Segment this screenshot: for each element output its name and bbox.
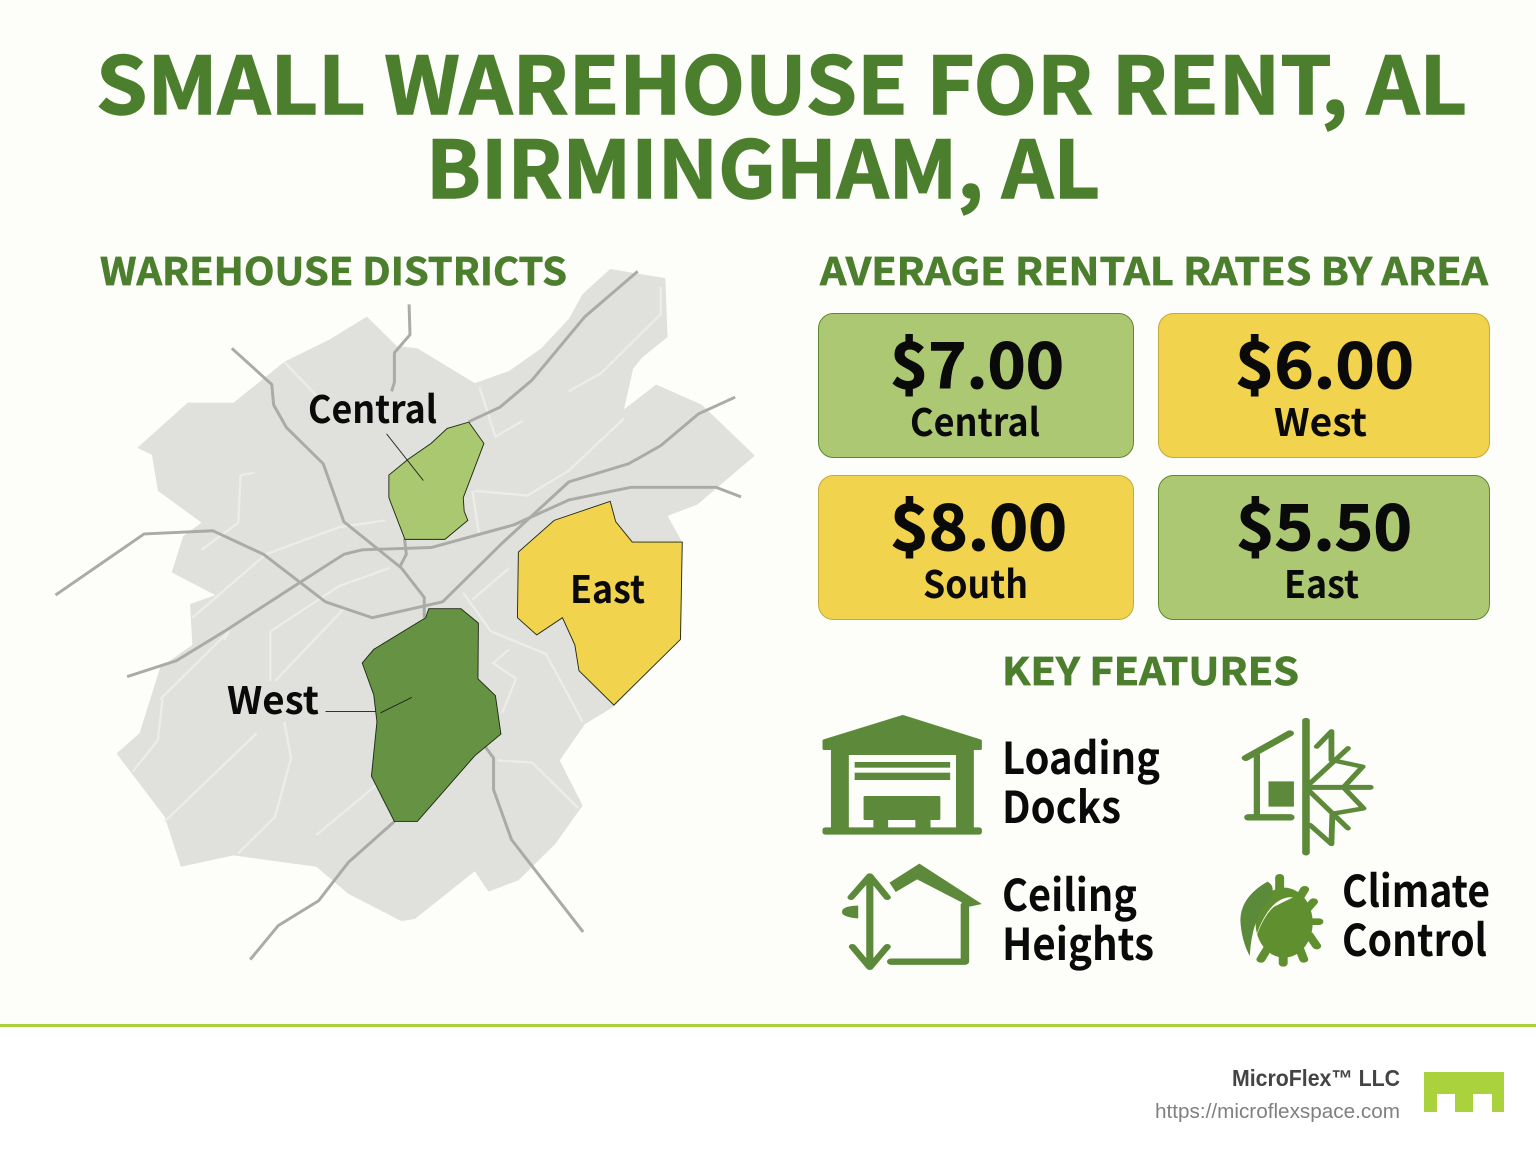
icon: climate gear leaf: [1240, 877, 1319, 963]
district: central: [389, 422, 484, 539]
feature label: ceiling heights: Heights: [1002, 909, 1154, 973]
title: [96, 22, 1467, 221]
district: west: [362, 609, 501, 821]
card: south rate: [818, 476, 1134, 620]
icon: house and snowflake: [1246, 721, 1370, 853]
map base: [56, 269, 755, 960]
footer company name: MicroFlex™ LLC: [1232, 1065, 1400, 1091]
icon: ceiling height: [842, 864, 982, 967]
footer url: https://microflexspace.com: [1155, 1101, 1400, 1123]
title: SMALL WAREHOUSE FOR RENT, AL: [96, 22, 1467, 137]
feature label: climate control: Climate: [1342, 856, 1490, 920]
card: east rate: $5.50: [1236, 478, 1412, 569]
feature label: loading docks: Docks: [1002, 772, 1121, 836]
leader lines: [326, 434, 423, 713]
card: south rate: $8.00: [890, 478, 1067, 569]
card: west rate: [1158, 314, 1490, 458]
icon: loading dock: [823, 716, 982, 835]
heading: warehouse districts: WAREHOUSE DISTRICTS: [100, 241, 567, 296]
feature label: climate control: Control: [1342, 905, 1487, 969]
footer logo: [1424, 1072, 1504, 1112]
feature label: climate control: [1342, 856, 1490, 969]
map label: east: East: [570, 559, 645, 614]
feature label: loading docks: [1002, 723, 1160, 836]
title: BIRMINGHAM, AL: [426, 106, 1100, 221]
roads: [56, 271, 741, 960]
card: east rate: East: [1284, 554, 1359, 609]
card: central rate: Central: [910, 392, 1040, 447]
card: central rate: [818, 314, 1134, 458]
heading: key features: KEY FEATURES: [1002, 641, 1299, 696]
panel: key features icons: [823, 716, 1370, 967]
district: east: [517, 501, 682, 705]
panel: warehouse districts map: [56, 269, 755, 960]
feature label: loading docks: Loading: [1002, 723, 1160, 787]
card: west rate: West: [1274, 392, 1367, 447]
feature label: ceiling heights: [1002, 860, 1154, 973]
footer: [0, 1024, 1536, 1154]
card: west rate: $6.00: [1235, 316, 1414, 407]
map label: central: Central: [308, 379, 437, 434]
card: central rate: $7.00: [890, 316, 1064, 407]
map label: west: West: [227, 670, 319, 725]
card: south rate: South: [923, 554, 1028, 609]
feature label: ceiling heights: Ceiling: [1002, 860, 1137, 924]
card: east rate: [1158, 476, 1490, 620]
heading: average rental rates: AVERAGE RENTAL RATES BY AREA: [819, 241, 1489, 296]
